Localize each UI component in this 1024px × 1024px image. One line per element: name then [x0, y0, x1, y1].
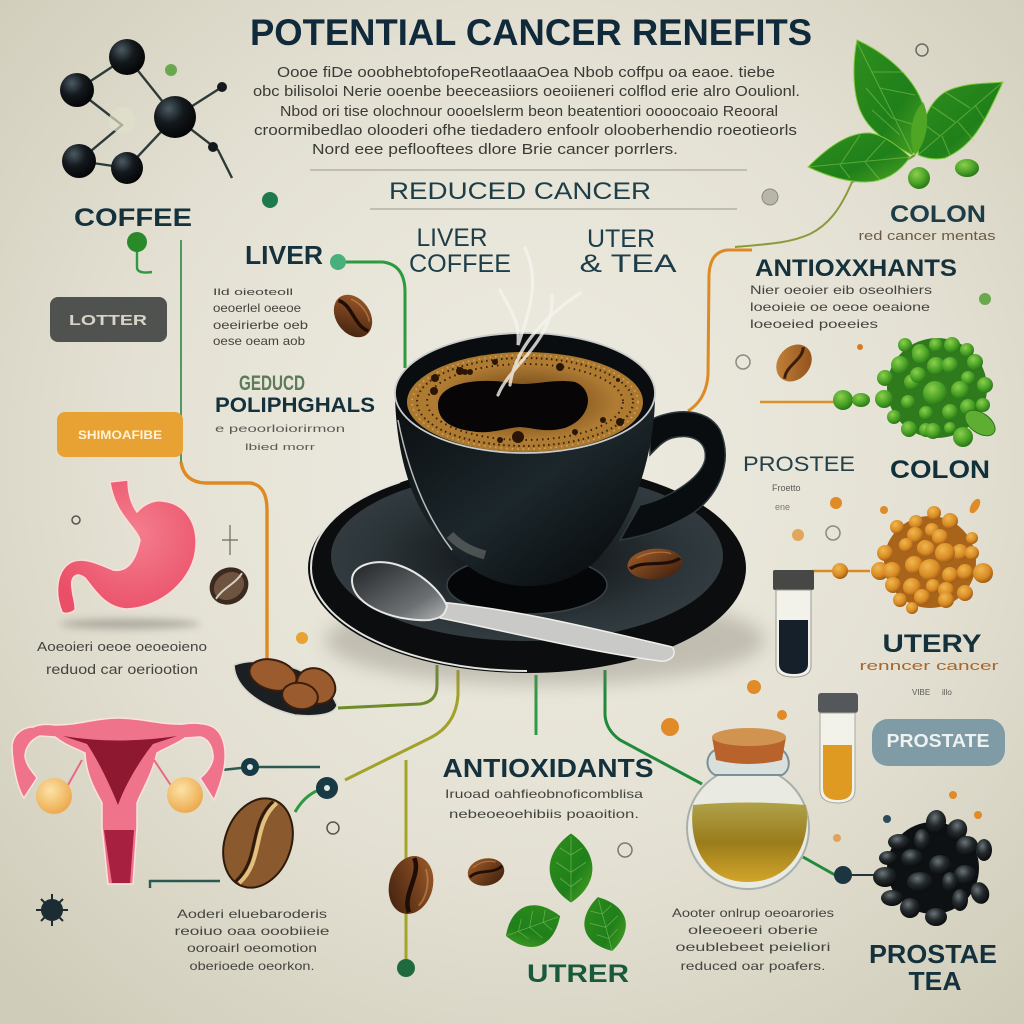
caption: prostee: ene — [775, 502, 790, 512]
badge: prostate: PROSTATE — [886, 731, 990, 751]
heading: liver coffee: LIVER — [416, 224, 488, 252]
label: prostate tea: TEA — [908, 966, 962, 996]
badge: prostate — [872, 719, 1005, 766]
label: liver: LIVER — [245, 240, 323, 270]
icon: green node — [127, 192, 278, 252]
heading: reduced polyphenols: POLIPHGHALS — [215, 394, 375, 417]
text: lower left block: ooroairl oeomotion — [187, 941, 317, 955]
icon: coffee cup illustration — [308, 248, 765, 685]
label: colon middle: COLON — [890, 456, 990, 484]
text: lower right block: Aooter onlrup oeoarories — [672, 906, 834, 920]
badge: lotter: LOTTER — [69, 312, 147, 329]
icon: molecule — [60, 39, 232, 184]
leaf: right — [918, 82, 1003, 159]
steam — [498, 248, 580, 395]
text: antioxidants right: loeoieie oe oeoe oeaione — [750, 300, 930, 314]
cup body — [395, 395, 655, 586]
text: antioxidants center: Iruoad oahfieobnoficomblisa — [445, 787, 643, 801]
node: uterus connectors — [241, 758, 338, 799]
text: lower right block — [672, 906, 834, 973]
icon: black seeds cluster — [873, 808, 992, 926]
caption: prostee — [772, 483, 801, 512]
text: antioxidants right — [750, 283, 932, 331]
heading: uter and tea: UTER — [587, 225, 655, 253]
text: polyphenols details: e peoorloiorirmon — [215, 424, 345, 435]
text: lower left block: oberioede oeorkon. — [190, 959, 314, 973]
section heading: reduced cancer: REDUCED CANCER — [389, 178, 651, 205]
small caption above badge — [912, 688, 952, 697]
text: liver details: oeeirierbe oeb — [213, 318, 308, 332]
intro paragraph — [253, 64, 800, 158]
leaf: tall — [854, 40, 925, 155]
saucer shadow — [325, 595, 765, 685]
text: lower right block: oeublebeet peieliori — [676, 940, 830, 954]
heading: reduced polyphenols — [215, 372, 375, 417]
icon: uterus — [12, 718, 225, 884]
icon: virus — [36, 894, 68, 926]
label: prostee: PROSTEE — [743, 453, 855, 476]
heading: liver coffee: COFFEE — [409, 250, 511, 278]
heading: antioxidants center: ANTIOXIDANTS — [442, 753, 654, 783]
text: stomach caption — [37, 639, 207, 677]
intro paragraph: obc bilisoloi Nerie ooenbe beeceasiiors oeoiieneri colflod erie alro Ooulionl. — [253, 83, 800, 100]
intro paragraph: croormibedlao olooderi ofhe tiedadero enfoolr olooberhendio roeotieorls — [254, 122, 797, 139]
text: lower left block: Aoderi eluebaroderis — [177, 907, 327, 921]
node: jar connector — [834, 866, 880, 884]
icon: orange seed cluster — [832, 506, 993, 614]
text: liver details — [213, 287, 308, 348]
caption: prostee: Froetto — [772, 483, 801, 493]
label: utery: UTERY — [882, 630, 982, 658]
icon: coffee bean right — [769, 337, 819, 389]
icon: dark coffee bean — [466, 855, 506, 889]
icon: honey jar — [687, 728, 809, 889]
badge: lotter — [50, 297, 167, 342]
text: antioxidants right: Nier oeoier eib oseolhiers — [750, 283, 932, 297]
bean on saucer — [626, 546, 684, 582]
section heading: reduced cancer — [310, 170, 747, 209]
text: stomach caption: reduod car oeriootion — [46, 661, 198, 677]
text: polyphenols details: lbied morr — [245, 442, 315, 452]
title: POTENTIAL CANCER RENEFITS — [250, 12, 812, 53]
badge: orange: SHIMOAFIBE — [78, 428, 162, 442]
node: liver connector — [330, 254, 346, 270]
intro paragraph: Nord eee peflooftees dlore Brie cancer porrlers. — [312, 141, 678, 158]
small caption above badge: VIBE — [912, 688, 930, 697]
text: lower right block: oleeoeeri oberie — [688, 923, 818, 937]
connector lines — [137, 182, 870, 965]
icon: three green leaves — [499, 833, 632, 956]
small caption above badge: illo — [942, 688, 952, 697]
leaf: center — [911, 102, 927, 155]
small orange dots — [661, 680, 982, 842]
icon: coffee bean liver — [326, 287, 380, 345]
cup handle — [620, 412, 725, 540]
text: liver details: oeoerlel oeeoe — [213, 301, 301, 315]
label: colon top: COLON — [890, 201, 986, 228]
small orange accents — [792, 497, 982, 541]
text: antioxidants center — [445, 787, 643, 821]
icon: black test tube — [773, 570, 814, 677]
coffee surface — [407, 352, 643, 452]
heading: uter and tea: & TEA — [580, 250, 677, 278]
icon: large coffee bean — [211, 788, 305, 898]
leaf: lower left — [808, 133, 910, 182]
icon: stomach — [58, 480, 200, 629]
label: utrer: UTRER — [527, 960, 629, 988]
text: antioxidants right: loeoeied poeeies — [750, 317, 878, 331]
icon: spoon with beans — [234, 654, 342, 716]
text: lower right block: reduced oar poafers. — [680, 959, 826, 973]
badge: orange — [57, 412, 183, 457]
text: liver details: oese oeam aob — [213, 334, 305, 348]
caption: red cancer: red cancer mentas — [858, 228, 996, 243]
text: liver details: Ild oieoteoll — [213, 287, 293, 297]
icon: bean near stomach — [202, 560, 256, 612]
intro paragraph: Nbod ori tise olochnour oooelslerm beon beatentiori oooocoaio Reooral — [280, 103, 778, 120]
text: lower left block — [174, 907, 330, 973]
text: polyphenols details — [215, 424, 345, 452]
cup rim — [395, 333, 655, 453]
intro paragraph: Oooe fiDe ooobhebtofopeReotlaaaOea Nbob coffpu oa eaoe. tiebe — [277, 64, 775, 81]
caption: utery: renncer cancer — [860, 658, 1000, 673]
spoon — [440, 602, 674, 661]
label: coffee: COFFEE — [74, 204, 192, 232]
heading: antioxidants right: ANTIOXXHANTS — [755, 255, 957, 282]
icon: green pea cluster — [833, 337, 1000, 447]
icon: orange test tube — [818, 693, 858, 803]
text: lower left block: reoiuo oaa ooobiieie — [174, 924, 330, 938]
label: prostate tea: PROSTAE — [869, 939, 997, 969]
text: stomach caption: Aoeoieri oeoe oeoeoieno — [37, 639, 207, 654]
heading: reduced polyphenols: GEDUCD — [239, 372, 305, 395]
icon: coffee bean lower — [382, 851, 440, 919]
small decorative icons — [72, 189, 991, 857]
saucer — [308, 463, 746, 673]
icon: leaves top right — [808, 40, 1003, 189]
node: lower connector — [397, 959, 415, 977]
text: antioxidants center: nebeoeoehibiis poaoition. — [449, 807, 639, 821]
